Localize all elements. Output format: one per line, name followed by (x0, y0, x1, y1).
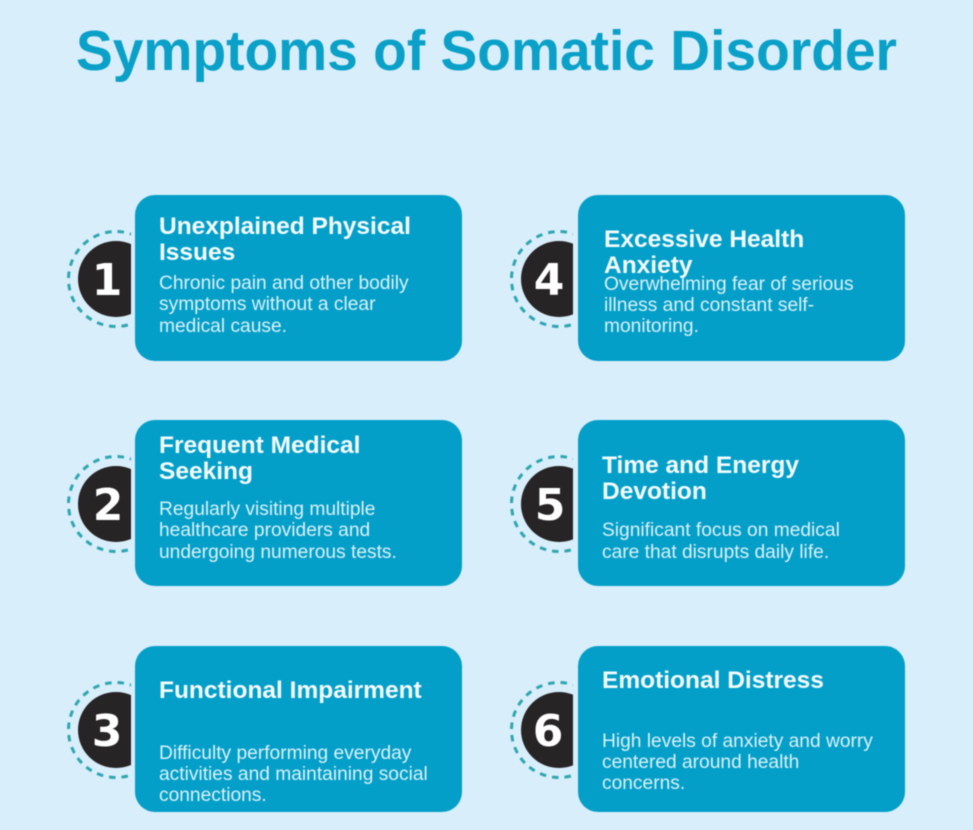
heading: symptom 3: Functional Impairment (159, 677, 422, 704)
panel: symptom 6 (512, 646, 905, 812)
panel: symptom 3 (68, 646, 462, 812)
text: symptom 2 description: healthcare providers and (159, 520, 370, 541)
icon: number 1 badge (66, 229, 132, 329)
heading: symptom 4: Anxiety (604, 252, 693, 279)
text: symptom 2 description: undergoing numerous tests. (159, 542, 397, 563)
panel: symptom 5 (512, 420, 905, 586)
heading: symptom 5: Time and Energy (602, 452, 799, 479)
title: Symptoms of Somatic Disorder (76, 19, 897, 83)
text: symptom 6 description: centered around health (602, 752, 799, 773)
text: symptom 5 description: care that disrupts daily life. (602, 542, 829, 563)
text: symptom 3 description: Difficulty performing everyday (159, 743, 411, 764)
text: symptom 1 description: medical cause. (159, 316, 287, 337)
text: symptom 6 description: High levels of anxiety and worry (602, 731, 873, 752)
heading: symptom 5: Devotion (602, 478, 707, 505)
panel: symptom 2 (68, 420, 462, 586)
text: symptom 6 description: concerns. (602, 773, 685, 794)
card background 5 (578, 420, 905, 586)
panel: symptom 1 (68, 195, 462, 361)
icon: number 3 badge (66, 680, 132, 780)
heading: symptom 6: Emotional Distress (602, 667, 824, 694)
text: symptom 2 description: Regularly visiting multiple (159, 499, 375, 520)
icon: number 2 badge (66, 454, 132, 554)
text: symptom 5 description: Significant focus on medical (602, 520, 840, 541)
text: symptom 3 description: connections. (159, 785, 267, 806)
icon: number 6 badge (509, 680, 574, 780)
icon: number 4 badge (509, 229, 574, 329)
text: symptom 1 description: symptoms without a clear (159, 294, 376, 315)
card background 1 (135, 195, 462, 361)
icon: number 5 badge (509, 454, 574, 554)
text: symptom 1 description: Chronic pain and other bodily (159, 273, 409, 294)
heading: symptom 1: Unexplained Physical (159, 213, 411, 240)
icon: number 3 badge: 3 (92, 706, 122, 757)
icon: number 4 badge: 4 (534, 255, 564, 306)
heading: symptom 2: Frequent Medical (159, 432, 360, 459)
heading: symptom 1: Issues (159, 239, 235, 266)
card background 6 (578, 646, 905, 812)
card background 4 (578, 195, 905, 361)
text: symptom 3 description: activities and maintaining social (159, 764, 428, 785)
card background 2 (135, 420, 462, 586)
icon: number 1 badge: 1 (92, 255, 122, 306)
text: symptom 4 description: Overwhelming fear of serious (604, 274, 854, 295)
text: symptom 4 description: illness and constant self- (604, 295, 814, 316)
heading: symptom 2: Seeking (159, 458, 253, 485)
text: symptom 4 description: monitoring. (604, 316, 699, 337)
icon: number 2 badge: 2 (93, 480, 123, 531)
icon: number 5 badge: 5 (535, 480, 565, 531)
panel: symptom 4 (512, 195, 905, 361)
card background 3 (135, 646, 462, 812)
heading: symptom 4: Excessive Health (604, 226, 804, 253)
icon: number 6 badge: 6 (533, 706, 563, 757)
